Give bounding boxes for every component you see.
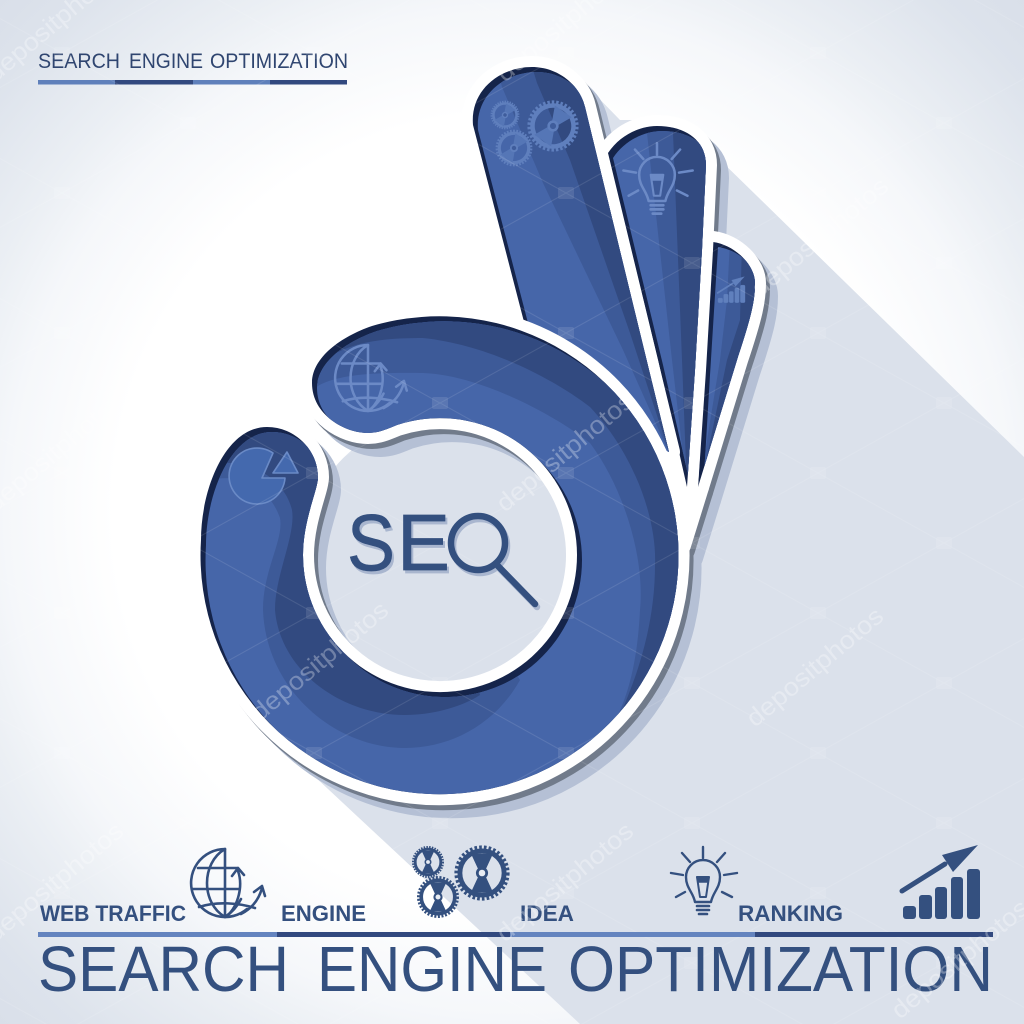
watermarks: depositphotos xyxy=(246,596,394,727)
hand outer shadow, light xyxy=(213,80,767,807)
icon: light bulb xyxy=(671,847,737,914)
long cast shadow xyxy=(280,82,1024,1024)
icon: light bulb small xyxy=(623,143,693,214)
SEO text: S xyxy=(347,498,395,587)
SEO text shadow: S xyxy=(349,501,397,590)
footer title xyxy=(38,933,993,1005)
ring finger (small fan) xyxy=(698,231,766,492)
watermarks: depositphotos xyxy=(746,172,894,303)
header title: ENGINE xyxy=(129,49,203,73)
label: engine: ENGINE xyxy=(281,901,366,926)
SEO text: E xyxy=(397,498,450,587)
icon: globe small xyxy=(335,345,407,411)
watermarks: depositphotos xyxy=(236,172,384,303)
icon: pie chart small xyxy=(229,448,298,504)
watermarks: depositphotos xyxy=(886,894,1024,1024)
icon: ranking chart small xyxy=(718,277,745,303)
watermarks: depositphotos xyxy=(491,817,639,948)
white join below fingers xyxy=(668,480,698,545)
hand outer shadow, gray xyxy=(205,72,759,799)
index finger (gears) xyxy=(466,61,680,455)
thumb and curled finger ring xyxy=(190,300,720,810)
footer title: ENGINE xyxy=(317,933,547,1005)
footer title: SEARCH xyxy=(38,933,289,1005)
icon: ranking chart xyxy=(902,845,980,919)
header title xyxy=(38,49,348,84)
icon: globe xyxy=(191,849,265,917)
header title: OPTIMIZATION xyxy=(210,49,348,73)
icon: gears xyxy=(413,847,508,916)
label: ranking: RANKING xyxy=(738,901,843,926)
SEO text xyxy=(347,498,450,587)
icon: gears small xyxy=(486,93,586,172)
icon: magnifying glass xyxy=(451,516,535,604)
SEO text shadow xyxy=(349,501,537,607)
label: idea: IDEA xyxy=(520,901,574,926)
footer rule xyxy=(38,932,993,937)
header title: SEARCH xyxy=(38,49,120,73)
watermarks: depositphotos xyxy=(741,602,889,733)
label: web traffic: WEB TRAFFIC xyxy=(40,901,186,926)
middle finger (light bulb) xyxy=(600,120,720,490)
watermarks: depositphotos xyxy=(491,387,639,518)
SEO text shadow: E xyxy=(399,501,452,590)
footer title: OPTIMIZATION xyxy=(568,933,993,1005)
SEO lens logo xyxy=(347,498,537,607)
